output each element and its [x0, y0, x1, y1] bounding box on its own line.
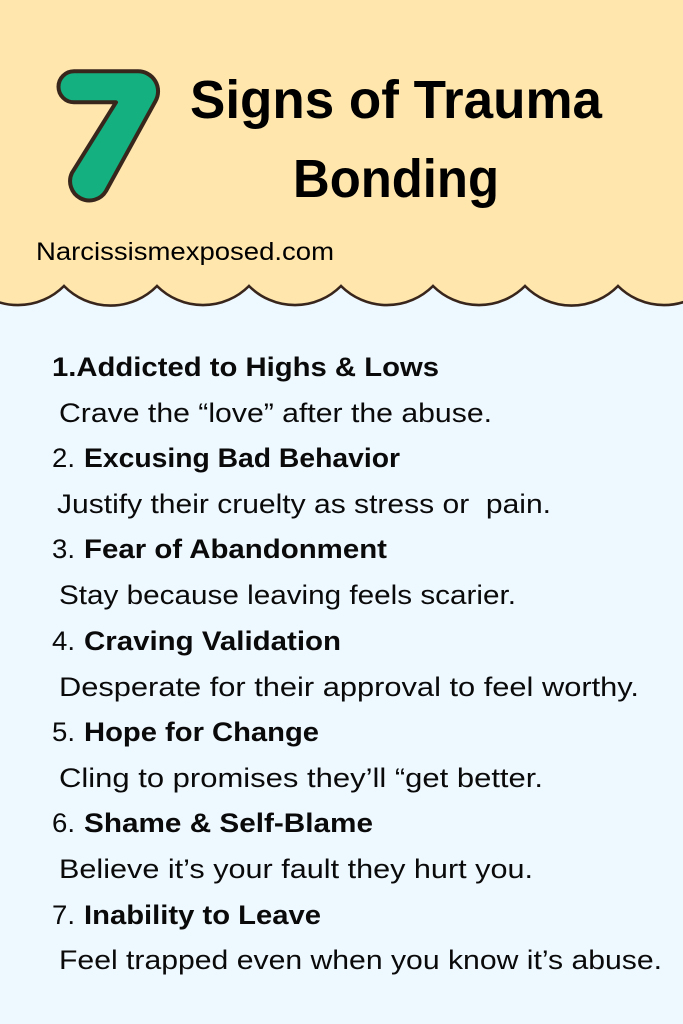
sign 3 — [52, 534, 516, 610]
sign 2: Justify their cruelty as stress or pain. — [57, 489, 551, 519]
sign 6: Believe it’s your fault they hurt you. — [59, 854, 533, 884]
sign 7: Inability to Leave — [84, 900, 321, 930]
sign 3: Fear of Abandonment — [84, 534, 387, 564]
sign 2: Excusing Bad Behavior — [84, 443, 401, 473]
sign 4: Desperate for their approval to feel worthy. — [59, 672, 639, 702]
title — [190, 70, 603, 209]
sign 6 — [52, 808, 533, 884]
sign 7: Feel trapped even when you know it’s abuse. — [59, 945, 662, 975]
icon: green number 7 — [58, 71, 158, 200]
sign 4: 4. — [52, 626, 75, 656]
sign 5: Cling to promises they’ll “get better. — [59, 763, 543, 793]
sign 1 — [52, 352, 492, 428]
website text: Narcissismexposed.com — [36, 238, 334, 266]
sign 3: 3. — [52, 534, 75, 564]
sign 5: 5. — [52, 717, 75, 747]
sign 4 — [52, 626, 639, 702]
sign 3: Stay because leaving feels scarier. — [59, 580, 516, 610]
sign 7: 7. — [52, 900, 75, 930]
sign 5: Hope for Change — [84, 717, 319, 747]
sign 2: 2. — [52, 443, 75, 473]
panel: scalloped header — [0, 0, 683, 306]
sign 1: 1.Addicted to Highs & Lows — [52, 352, 439, 382]
sign 6: 6. — [52, 808, 75, 838]
title: Signs of Trauma — [190, 70, 603, 130]
title: Bonding — [293, 149, 499, 209]
sign 7 — [52, 900, 662, 975]
sign 5 — [52, 717, 543, 793]
sign 6: Shame & Self-Blame — [84, 808, 373, 838]
list of seven signs — [52, 352, 662, 975]
sign 1: Crave the “love” after the abuse. — [59, 398, 492, 428]
sign 2 — [52, 443, 551, 519]
sign 4: Craving Validation — [84, 626, 341, 656]
